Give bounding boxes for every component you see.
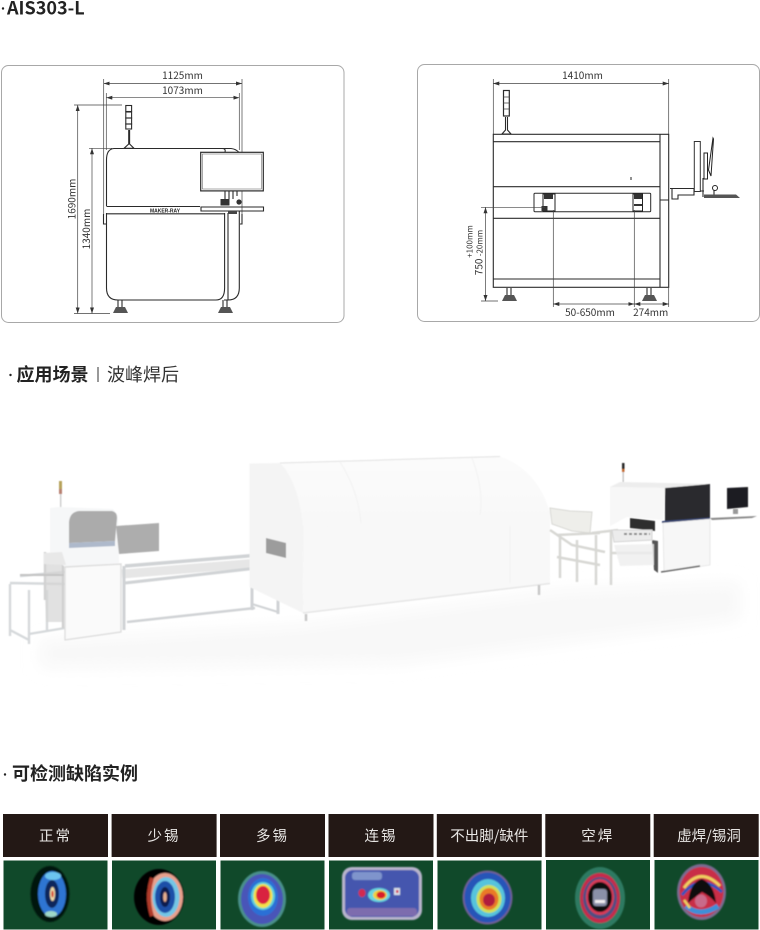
- header: 空焊: [545, 814, 650, 857]
- header: 少锡: [112, 814, 217, 857]
- machine top: [610, 482, 710, 488]
- window: [69, 511, 117, 543]
- dimension: 1410mm: 1410mm: [562, 67, 603, 82]
- transfer conveyor: [550, 508, 652, 585]
- monitor: [201, 152, 263, 191]
- tower: [59, 481, 62, 489]
- cabinet lower: [65, 564, 121, 640]
- wave soldering oven: [250, 456, 550, 621]
- dimension: 750mm height: [464, 207, 545, 301]
- dimension: 1690mm: [64, 105, 122, 314]
- header: 正常: 正常: [39, 825, 72, 846]
- dark front panel: [665, 484, 710, 522]
- foot right: [223, 300, 227, 307]
- image: normal solder: [4, 860, 108, 930]
- inspection machine left: [10, 481, 159, 644]
- dimension: 750mm height: 750 -20mm: [470, 230, 486, 275]
- lower cabinet: [663, 519, 710, 572]
- conveyor clamp right: [633, 194, 642, 211]
- middle conveyor: [122, 555, 278, 630]
- header: 多锡: 多锡: [256, 825, 289, 846]
- inner bay: [630, 518, 655, 531]
- header: 正常: [3, 814, 108, 857]
- dimension: 274mm: 274mm: [633, 304, 668, 319]
- signal tower: [502, 90, 511, 134]
- dimension: 750mm height: +100mm: [464, 225, 476, 258]
- heading: application scenario: [9, 361, 179, 387]
- monitor side arm: [660, 138, 740, 200]
- inspection machine right: [610, 463, 757, 573]
- image: solder bridge: [329, 860, 433, 930]
- floor shade: [40, 582, 740, 668]
- header: 虚焊/锡洞: 虚焊/锡洞: [677, 825, 741, 846]
- heading: application scenario: 应用场景: [16, 361, 88, 387]
- shelf: [710, 516, 757, 520]
- conveyor clamp left: [542, 194, 555, 211]
- dimension: 1340mm: 1340mm: [78, 209, 93, 249]
- dimension: 1073mm: [106, 82, 239, 150]
- header: 少锡: 少锡: [148, 825, 180, 846]
- dimension: 1125mm: [104, 67, 242, 215]
- dimension: 50-650mm: [553, 210, 669, 319]
- left conveyor stand: [10, 552, 65, 644]
- image: missing pin: [438, 860, 542, 930]
- heading: defect examples: 可检测缺陷实例: [12, 760, 138, 786]
- foot left: [118, 300, 122, 307]
- image: empty solder: [546, 860, 650, 930]
- panel: side dimension drawing: [418, 64, 760, 322]
- signal tower: [124, 106, 134, 148]
- keyboard shelf: [201, 207, 264, 211]
- heading: application scenario: 波峰焊后: [107, 361, 179, 387]
- dimension: 50-650mm: 50-650mm: [565, 304, 615, 319]
- header: 多锡: [220, 814, 325, 857]
- table: defect headers: [3, 814, 759, 857]
- monitor: [727, 487, 748, 509]
- scene: production line photo: [10, 456, 757, 668]
- image: excess solder: [220, 860, 324, 930]
- machine side: [610, 487, 665, 526]
- control module: [612, 530, 652, 542]
- oven feet: [306, 585, 539, 621]
- image: false solder / void: [654, 860, 758, 930]
- dimension: 1073mm: 1073mm: [162, 82, 203, 97]
- machine front view: [104, 106, 264, 313]
- dimension: 1125mm: 1125mm: [162, 67, 203, 82]
- machine side view: [493, 90, 740, 301]
- feet: [507, 288, 651, 295]
- dimension: 1690mm: 1690mm: [64, 179, 78, 219]
- brand label: MAKER-RAY: [150, 208, 181, 214]
- panel: front dimension drawing: [2, 66, 344, 322]
- header: 空焊: 空焊: [581, 825, 614, 846]
- monitor: [116, 523, 159, 554]
- header: 不出脚/缺件: 不出脚/缺件: [450, 825, 528, 846]
- blue band: [662, 518, 710, 523]
- tower: [622, 463, 624, 469]
- dimension: 1410mm: [493, 67, 669, 135]
- image: insufficient solder: [112, 860, 216, 930]
- cabinet upper: [50, 507, 119, 567]
- header: 虚焊/锡洞: [654, 814, 759, 857]
- header: 连锡: [328, 814, 434, 857]
- oven inlet plate: [266, 538, 286, 558]
- conveyor window: [534, 193, 651, 212]
- header: 连锡: 连锡: [364, 825, 398, 846]
- header: 不出脚/缺件: [437, 814, 542, 857]
